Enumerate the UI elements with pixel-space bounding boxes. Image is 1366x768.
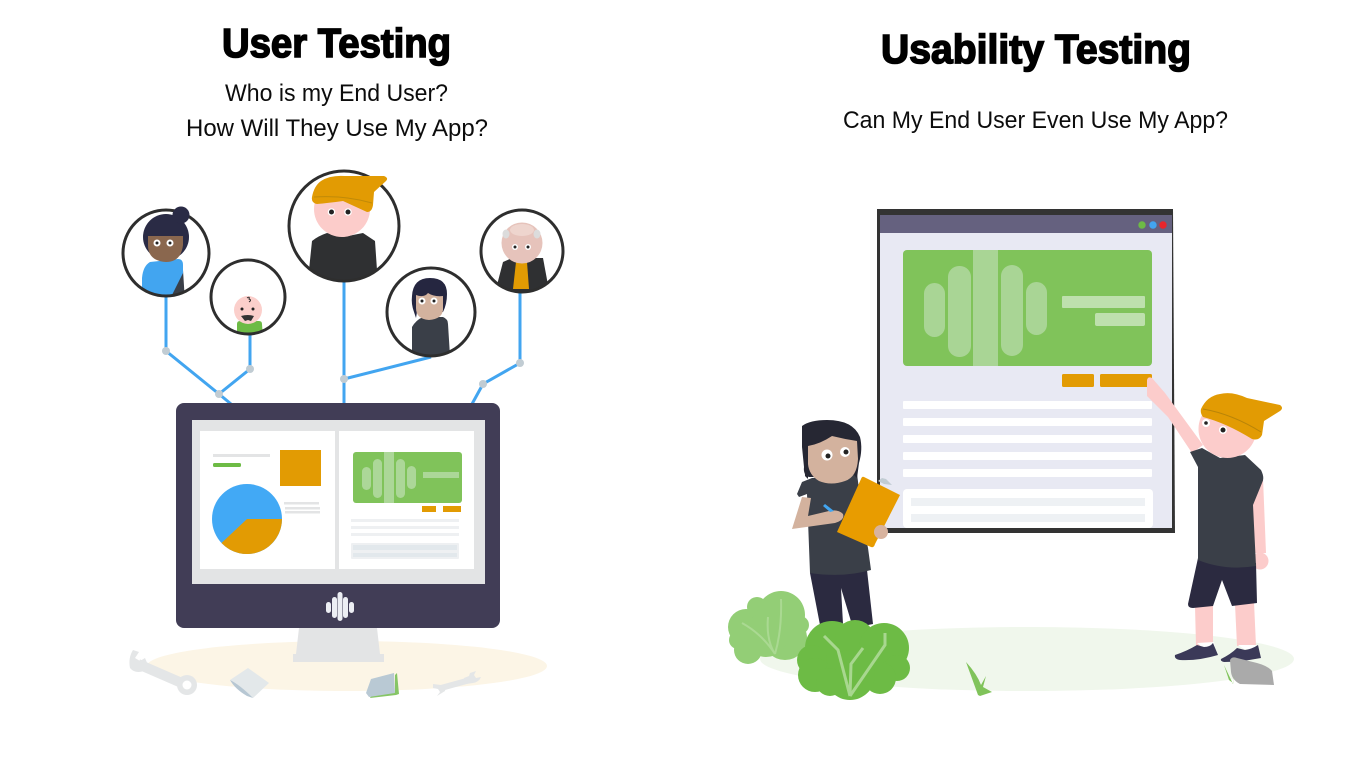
monitor stand — [293, 628, 384, 662]
heading: usability testing: Usability Testing — [881, 26, 1191, 72]
window body — [880, 232, 1172, 528]
icon: wrench left — [129, 650, 197, 695]
pen — [823, 504, 834, 512]
ground shadow under monitor — [147, 641, 547, 691]
monitor body — [176, 403, 500, 628]
ground shadow — [760, 627, 1294, 691]
subheading: who is my end user: Who is my End User? — [225, 80, 448, 107]
legs — [1195, 602, 1256, 646]
panel: user testing — [123, 20, 563, 698]
clipboard — [837, 477, 900, 547]
head — [1198, 400, 1256, 458]
avatar: elderly man — [481, 210, 563, 296]
hero banner — [903, 250, 1152, 366]
grass tuft — [966, 662, 992, 696]
small grass — [1224, 665, 1235, 684]
raised arm — [1147, 377, 1203, 453]
icon: book — [366, 673, 399, 698]
shoes — [1175, 643, 1261, 662]
window frame — [877, 209, 1175, 533]
man with orange hat — [1147, 377, 1282, 662]
shorts — [1188, 558, 1257, 608]
screen: analytics page — [200, 431, 335, 569]
socks — [1197, 642, 1257, 649]
avatar: man with orange hat — [289, 171, 399, 290]
title bar — [880, 215, 1172, 233]
avatar: baby — [211, 260, 285, 338]
connector lines from users to monitor — [162, 280, 524, 404]
screen: app page — [339, 431, 474, 569]
monitor logo — [326, 592, 354, 621]
rock — [1230, 657, 1274, 685]
shirt — [1190, 448, 1263, 568]
lowered arm — [1252, 478, 1268, 570]
monitor screen — [192, 420, 485, 584]
action buttons — [1062, 374, 1152, 387]
pie chart — [212, 484, 282, 554]
woman with clipboard — [792, 420, 900, 628]
footer card — [903, 489, 1153, 528]
avatar: woman with hair bun — [123, 206, 209, 302]
face and hair — [802, 420, 861, 484]
avatar: woman with dark hair — [387, 268, 475, 356]
monitor — [176, 403, 500, 628]
window buttons — [1138, 221, 1167, 229]
text lines — [903, 401, 1152, 477]
subheading: how will they use my app: How Will They Use My App? — [186, 115, 488, 142]
heading: user testing: User Testing — [222, 20, 451, 66]
eyes — [1202, 419, 1227, 434]
torso — [797, 474, 871, 575]
hand — [874, 525, 888, 539]
icon: paper scrap — [230, 668, 269, 698]
icon: wrench right — [433, 671, 481, 696]
writing arm — [792, 497, 843, 529]
bush: light — [728, 591, 809, 664]
subheading: can my end user even use my app: Can My End User Even Use My App? — [843, 107, 1228, 134]
browser window — [877, 209, 1175, 533]
bush: dark — [797, 620, 910, 700]
pants — [810, 570, 873, 628]
panel: usability testing — [728, 26, 1294, 700]
hat — [1201, 393, 1282, 440]
